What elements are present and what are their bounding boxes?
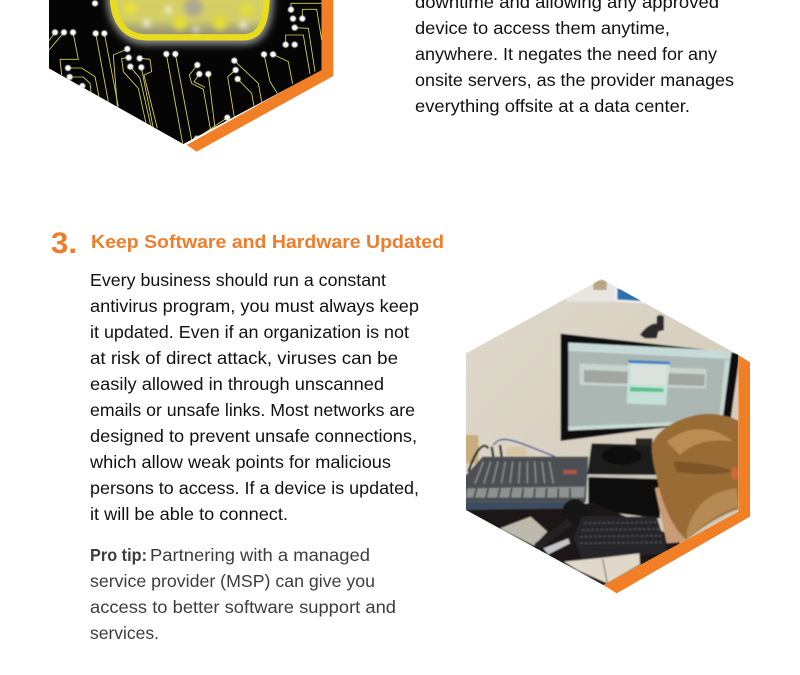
paragraph: antivirus advice: it will be able to connect. <box>90 504 288 524</box>
paragraph: antivirus advice <box>89 270 419 524</box>
pro tip text: service provider (MSP) can give you <box>90 571 375 591</box>
webcam <box>640 315 664 338</box>
pro tip text: access to better software support and <box>90 597 396 617</box>
open book <box>564 553 640 583</box>
monitor stand <box>634 437 654 446</box>
audio cables <box>493 439 555 457</box>
pro tip text: Pro tip: <box>90 545 147 565</box>
paragraph: cloud computing text: everything offsite at a data center. <box>415 96 690 116</box>
yellow circuit traces <box>49 3 323 143</box>
pro tip text <box>90 545 396 643</box>
glowing yellow pill <box>113 0 267 37</box>
black circuit board <box>49 0 323 147</box>
paragraph: antivirus advice: designed to prevent unsafe connections, <box>90 426 417 446</box>
heading: keep software and hardware updated: Keep Software and Hardware Updated <box>91 231 444 252</box>
paragraph: antivirus advice: emails or unsafe links. Most networks are <box>90 400 415 420</box>
person with ponytail <box>655 482 687 543</box>
monitor <box>561 334 740 441</box>
paper notes <box>500 517 547 546</box>
pill glow <box>112 0 268 39</box>
paragraph: cloud computing text: device to access them anytime, <box>415 18 670 38</box>
microphone <box>562 498 585 510</box>
circuit board hexagon image <box>49 0 333 152</box>
photo content <box>460 275 747 595</box>
audio mixer <box>460 457 588 502</box>
paragraph: antivirus advice: which allow weak points for malicious <box>89 452 391 472</box>
pro tip text: services. <box>90 623 159 643</box>
white solder points <box>52 0 305 141</box>
paragraph: cloud computing text: anywhere. It negates the need for any <box>415 44 717 64</box>
paragraph: cloud computing text: onsite servers, as the provider manages <box>415 70 734 90</box>
desk and boxes <box>587 443 657 475</box>
orange hexagon accent <box>603 355 750 593</box>
orange hexagon accent <box>187 0 333 152</box>
section number 3: 3. <box>51 227 77 260</box>
paragraph: antivirus advice: easily allowed in through unscanned <box>90 374 384 394</box>
paragraph: antivirus advice: it updated. Even if an organization is not <box>90 322 409 342</box>
paragraph: cloud computing text <box>415 0 734 116</box>
keyboard <box>574 517 668 558</box>
computer workstation hexagon photo <box>460 275 750 595</box>
paragraph: antivirus advice: antivirus program, you must always keep <box>90 296 419 316</box>
paragraph: antivirus advice: at risk of direct attack, viruses can be <box>90 348 398 368</box>
pro tip text: Partnering with a managed <box>150 545 370 565</box>
paragraph: antivirus advice: Every business should run a constant <box>90 270 386 290</box>
paragraph: antivirus advice: persons to access. If a device is updated, <box>90 478 419 498</box>
